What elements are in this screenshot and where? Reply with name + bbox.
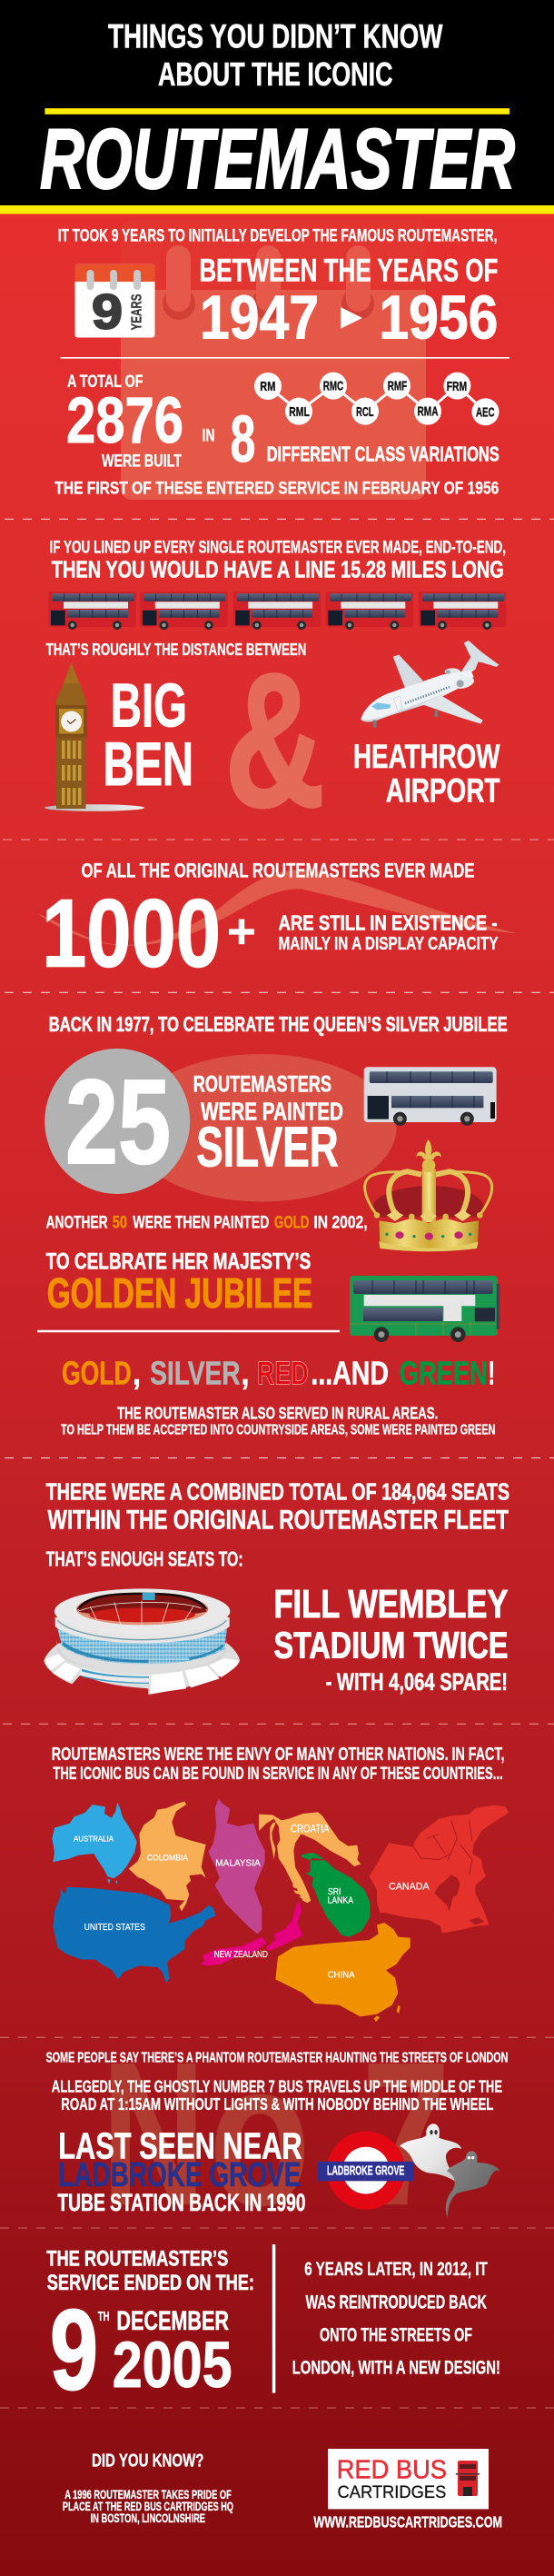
silver text: ROUTEMASTERS — [193, 1072, 331, 1098]
total built: 2876 — [66, 385, 183, 457]
existence text: ARE STILL IN EXISTENCE - — [278, 910, 498, 934]
row of buses — [48, 592, 506, 630]
icon: calendar: YEARS — [129, 294, 145, 331]
did you know text — [63, 2488, 233, 2525]
map shapes: west — [52, 1798, 266, 1984]
colours line: GOLD — [62, 1354, 132, 1391]
gold text: ANOTHER — [46, 1213, 108, 1233]
last seen text: LAST SEEN NEAR — [58, 2125, 302, 2167]
colours line: , — [133, 1354, 141, 1391]
icon: crown — [365, 1139, 492, 1251]
heathrow label — [353, 737, 500, 810]
reintroduced text: 6 YEARS LATER, IN 2012, IT — [304, 2259, 488, 2280]
panel: jubilee — [37, 1012, 508, 1437]
total built: IN — [202, 425, 214, 445]
country labels: AUSTRALIA — [74, 1835, 114, 1844]
service ended text — [46, 2247, 254, 2295]
panel: still in existence — [37, 860, 518, 987]
gold text: WERE THEN PAINTED — [133, 1213, 269, 1233]
icon: logo bus — [456, 2461, 480, 2496]
rural text: THE ROUTEMASTER ALSO SERVED IN RURAL AREAS. — [117, 1405, 438, 1423]
did you know text: PLACE AT THE RED BUS CARTRIDGES HQ — [63, 2500, 233, 2513]
silver text: SILVER — [196, 1116, 339, 1179]
yellow band — [0, 205, 554, 214]
last seen text — [57, 2125, 306, 2216]
class variation chain: RMC — [323, 380, 343, 394]
class variation chain: RML — [289, 405, 310, 420]
class variation chain: AEC — [476, 405, 495, 420]
enough seats text: THAT’S ENOUGH SEATS TO: — [46, 1547, 243, 1570]
end date: 2005 — [113, 2330, 232, 2402]
did you know text: A 1996 ROUTEMASTER TAKES PRIDE OF — [64, 2488, 232, 2501]
silver text: WERE PAINTED — [201, 1098, 343, 1126]
country labels: NEW ZEALAND — [214, 1949, 268, 1960]
icon: plane — [361, 641, 499, 728]
map shapes: east — [259, 1805, 509, 2022]
wembley text — [274, 1582, 508, 1696]
country labels — [74, 1822, 430, 1981]
colours line: ...AND — [311, 1354, 389, 1391]
logo: RED BUS — [337, 2456, 447, 2485]
panel: countries — [52, 1745, 509, 2022]
total built: A TOTAL OF — [67, 372, 143, 392]
arrow — [341, 307, 362, 329]
total built: 8 — [231, 403, 255, 476]
countries heading — [52, 1745, 505, 1784]
icon: big ben — [45, 662, 144, 811]
reintroduced text: ONTO THE STREETS OF — [320, 2324, 472, 2345]
class variation chain: RMF — [388, 380, 407, 394]
colours line: ! — [489, 1354, 495, 1391]
rural text — [61, 1405, 495, 1437]
plus sign: + — [227, 904, 256, 959]
panel: development years — [54, 221, 509, 500]
year 1956: 1956 — [379, 283, 498, 353]
watermark no 7: o — [209, 2019, 311, 2248]
class variation chain: RM — [260, 380, 275, 394]
end date: DECEMBER — [116, 2306, 229, 2336]
end date: TH — [98, 2309, 110, 2324]
big ben label: BEN — [104, 730, 193, 799]
country labels: COLOMBIA — [147, 1854, 189, 1864]
title line one: THINGS YOU DIDN’T KNOW — [108, 18, 443, 55]
gold text: IN 2002, — [313, 1213, 368, 1233]
last seen text: TUBE STATION BACK IN 1990 — [57, 2189, 306, 2216]
gold text: 50 — [113, 1213, 127, 1233]
light ellipse — [127, 1054, 396, 1202]
heathrow label: AIRPORT — [386, 772, 500, 810]
swoosh — [37, 870, 518, 946]
country labels: LANKA — [328, 1895, 353, 1905]
gold text — [46, 1213, 368, 1233]
grey circle — [45, 1049, 190, 1194]
colours line: GREEN — [400, 1354, 488, 1391]
number 25: 25 — [65, 1055, 171, 1189]
panel: line of buses — [45, 537, 506, 847]
class variation chain: RCL — [356, 405, 374, 420]
reintroduced text — [292, 2259, 500, 2378]
icon: calendar — [74, 264, 154, 340]
colours line: , — [242, 1354, 249, 1391]
ampersand: & — [224, 633, 325, 847]
country labels: UNITED STATES — [84, 1922, 145, 1933]
icon: tube roundel — [318, 2139, 414, 2202]
total built — [66, 372, 500, 476]
colours line — [62, 1354, 495, 1391]
big number: 1000 — [42, 880, 221, 987]
icon: ghosts — [400, 2123, 500, 2217]
watermark calendar — [121, 221, 426, 500]
logo — [328, 2449, 489, 2509]
existence text — [278, 910, 499, 954]
country labels: CROATIA — [291, 1822, 329, 1835]
country labels: CANADA — [389, 1882, 430, 1893]
class variation chain — [254, 373, 500, 425]
big ben label — [104, 671, 193, 799]
service ended text: SERVICE ENDED ON THE: — [47, 2271, 254, 2295]
panel: seats — [44, 1478, 509, 1696]
silver text — [193, 1072, 343, 1179]
last seen text: LADBROKE GROVE — [58, 2156, 301, 2194]
panel: phantom bus — [46, 2019, 508, 2248]
heathrow label: HEATHROW — [353, 737, 500, 775]
total built: WERE BUILT — [102, 451, 182, 471]
title line two: ABOUT THE ICONIC — [158, 55, 392, 93]
big ben label: BIG — [111, 671, 187, 740]
golden jubilee: GOLDEN JUBILEE — [47, 1269, 312, 1317]
colours line: SILVER — [150, 1354, 240, 1391]
watermark no 7: N — [102, 2019, 205, 2248]
celebrate text: TO CELBRATE HER MAJESTY’S — [46, 1249, 311, 1275]
country labels: CHINA — [328, 1970, 355, 1981]
class variation chain: FRM — [447, 380, 467, 394]
watermark no 7: 7 — [361, 2019, 450, 2248]
colours line: RED — [257, 1354, 309, 1391]
end date — [50, 2288, 232, 2414]
did you know heading: DID YOU KNOW? — [92, 2452, 203, 2472]
icon: silver bus — [364, 1067, 497, 1126]
country labels: SRI — [328, 1887, 341, 1897]
distance text: THAT’S ROUGHLY THE DISTANCE BETWEEN — [46, 640, 306, 659]
logo: CARTRIDGES — [338, 2482, 446, 2502]
panel: footer — [63, 2449, 502, 2531]
panel: service ended — [46, 2244, 500, 2414]
country labels: MALAYSIA — [215, 1857, 261, 1868]
service ended text: THE ROUTEMASTER’S — [46, 2247, 228, 2272]
year 1947: 1947 — [200, 283, 319, 353]
class variation chain: RMA — [418, 404, 439, 419]
phantom details — [52, 2076, 502, 2114]
watermark no 7 — [102, 2019, 450, 2248]
icon: calendar: 9 — [92, 285, 123, 340]
icon: stadium — [44, 1588, 240, 1695]
did you know text: IN BOSTON, LINCOLNSHIRE — [91, 2511, 205, 2525]
header panel — [0, 0, 554, 214]
icon: tube roundel: LADBROKE GROVE — [327, 2164, 404, 2179]
gold text: GOLD — [274, 1213, 309, 1233]
yellow rule — [45, 108, 509, 114]
icon: green bus — [350, 1276, 500, 1342]
end date: 9 — [50, 2288, 98, 2414]
